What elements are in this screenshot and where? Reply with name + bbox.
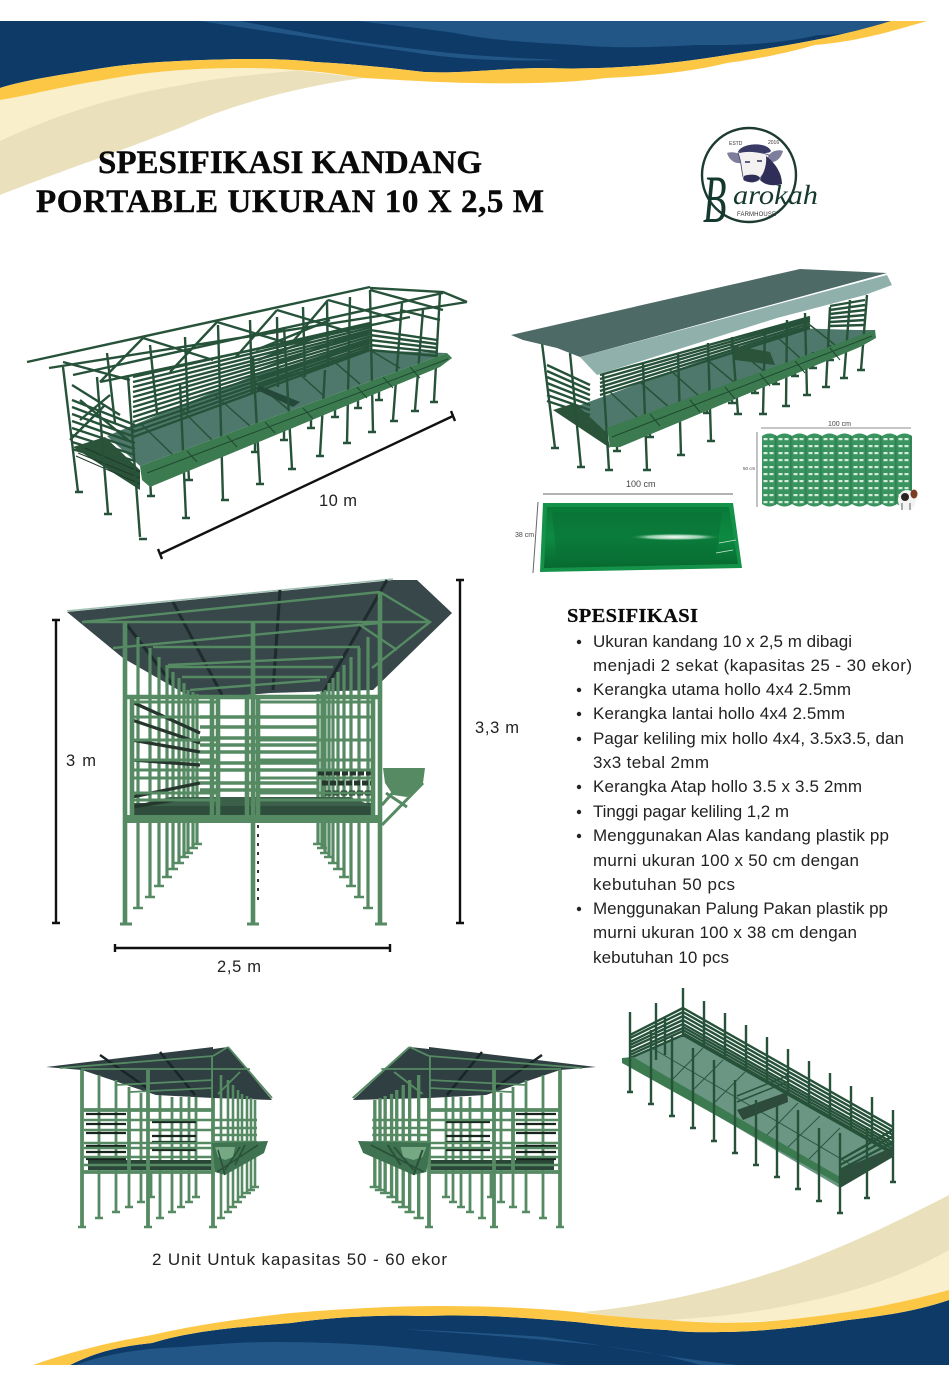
trough cross-section — [383, 768, 425, 797]
plastic feed trough product: 100 cm — [626, 479, 656, 489]
drawing: front view — [67, 579, 452, 924]
specification list: menjadi 2 sekat (kapasitas 25 - 30 ekor) — [593, 656, 912, 675]
post feet — [627, 1092, 896, 1213]
drawing: side view left — [46, 1047, 272, 1227]
floor — [622, 1035, 893, 1188]
drawing: side view right (mirrored) — [353, 1047, 596, 1227]
floor — [107, 350, 447, 466]
drawing: covered barn perspective — [511, 269, 892, 470]
middle partition — [257, 385, 300, 407]
posts — [63, 290, 440, 537]
plastic floor panel product: 100 cm — [828, 421, 851, 428]
navy wave — [0, 21, 891, 88]
end wall rails — [547, 300, 865, 415]
dimension: 10 m — [158, 411, 455, 559]
rear wall rails — [133, 323, 370, 437]
title: SPESIFIKASI KANDANG — [98, 145, 482, 181]
rear posts — [683, 988, 893, 1198]
center rails — [200, 717, 318, 790]
rear fence rails — [683, 1008, 893, 1154]
logo sheep head — [727, 144, 783, 185]
main post feet — [120, 922, 387, 926]
main frame — [125, 592, 380, 923]
specification heading: SPESIFIKASI — [567, 605, 698, 627]
end wall rails — [70, 385, 135, 467]
logo: Barokah Farmhouse — [702, 128, 818, 237]
specification list: Ukuran kandang 10 x 2,5 m dibagi — [593, 632, 852, 651]
plastic floor panel product — [743, 421, 918, 510]
floor — [575, 328, 876, 433]
yellow wave — [0, 21, 927, 100]
specification list: Pagar keliling mix hollo 4x4, 3.5x3.5, dan — [593, 729, 904, 748]
dimension: 10 m: 10 m — [319, 492, 357, 510]
receding posts — [138, 637, 368, 908]
dimension: 3,3 m — [456, 580, 519, 923]
floor band — [132, 803, 373, 815]
dimension: 2,5 m — [115, 944, 390, 976]
roof — [67, 580, 452, 697]
lighter blue stripe — [358, 21, 891, 47]
dimension: 3,3 m: 3,3 m — [475, 719, 519, 737]
drawing: open frame perspective, 10 m — [27, 287, 467, 539]
title — [36, 145, 544, 220]
roof ribs — [127, 580, 387, 695]
drawing: floor and fence without roof — [622, 988, 896, 1213]
specification list: Kerangka lantai hollo 4x4 2.5mm — [593, 704, 845, 723]
rear wall rails — [600, 317, 810, 395]
plastic feed trough product: 38 cm — [515, 532, 534, 539]
logo subtitle: FARMHOUSE — [737, 212, 776, 218]
specification list: kebutuhan 50 pcs — [593, 875, 735, 894]
cream wave — [0, 68, 364, 195]
post feet — [551, 360, 865, 470]
roof — [511, 269, 887, 357]
feed trough row — [607, 330, 876, 447]
cream wave — [582, 1195, 949, 1322]
roof frame — [27, 287, 467, 382]
title: PORTABLE UKURAN 10 X 2,5 M — [36, 184, 544, 220]
icon: goat — [898, 490, 918, 510]
partition — [737, 1092, 788, 1120]
logo year: 2016 — [768, 140, 779, 146]
feed trough row — [140, 353, 452, 487]
yellow wave — [33, 1290, 949, 1365]
dark side rails — [132, 702, 200, 807]
specification list: kebutuhan 10 pcs — [593, 948, 729, 967]
specification list: Kerangka Atap hollo 3.5 x 3.5 2mm — [593, 777, 862, 796]
fence rails — [132, 702, 375, 800]
specification list: Kerangka utama hollo 4x4 2.5mm — [593, 680, 851, 699]
posts — [542, 295, 867, 470]
specification list: Menggunakan Palung Pakan plastik pp — [593, 899, 888, 918]
top wave banner — [0, 21, 927, 195]
dimension: 3 m — [52, 620, 96, 923]
caption: two units: 2 Unit Untuk kapasitas 50 - 60 ekor — [152, 1250, 447, 1269]
lighter blue wave — [76, 1342, 564, 1365]
navy wave — [70, 1300, 949, 1365]
specification list: 3x3 tebal 2mm — [593, 753, 709, 772]
logo script word: arokah — [733, 180, 818, 210]
right end wall — [840, 1147, 893, 1188]
bottom wave banner — [33, 1195, 949, 1365]
logo script initial: B — [703, 162, 726, 237]
specification list — [577, 632, 912, 967]
left fence rails — [630, 1008, 683, 1058]
front posts — [630, 1003, 840, 1213]
plastic feed trough product — [515, 479, 742, 573]
roof rafters — [82, 592, 430, 690]
specification list: murni ukuran 100 x 50 cm dengan — [593, 851, 859, 870]
trough — [622, 1057, 841, 1185]
dimension: 2,5 m: 2,5 m — [217, 958, 261, 976]
plastic floor panel product: 50 cm — [743, 466, 756, 471]
logo year text: ESTD — [729, 141, 743, 147]
specification list: Tinggi pagar keliling 1,2 m — [593, 802, 789, 821]
specification list: murni ukuran 100 x 38 cm dengan — [593, 923, 857, 942]
specification list: Menggunakan Alas kandang plastik pp — [593, 826, 889, 845]
post feet — [75, 400, 438, 539]
dimension: 3 m: 3 m — [66, 752, 96, 770]
